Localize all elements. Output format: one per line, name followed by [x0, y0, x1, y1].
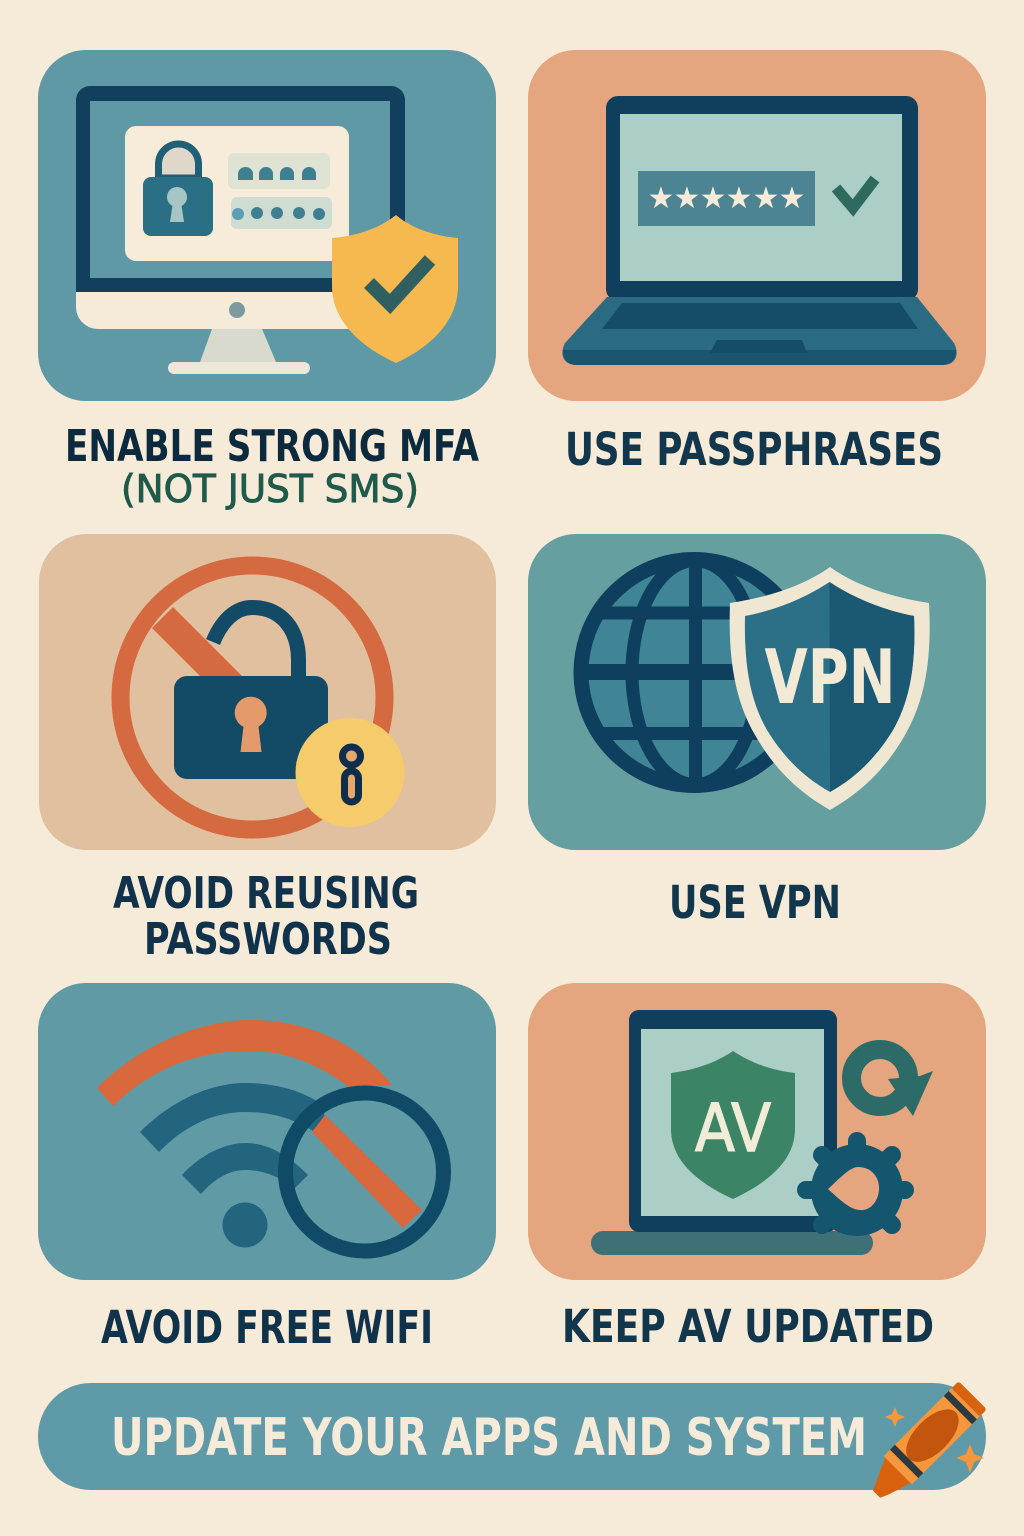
panel: use passphrases [528, 50, 986, 401]
icon: yellow shield with check [332, 215, 458, 363]
icon: prohibited padlock with key badge [120, 566, 404, 830]
icon: laptop with AV shield [591, 1010, 873, 1255]
icon: laptop with password field: ★ [700, 181, 726, 216]
icon: refresh arrow [852, 1050, 933, 1116]
icon: laptop with password field: ★ [779, 181, 805, 216]
icon: laptop with AV shield: AV [695, 1090, 771, 1167]
icon: VPN shield: VPN [764, 633, 896, 721]
panel: keep AV updated [528, 983, 986, 1280]
icon: laptop with password field: ★ [648, 181, 674, 216]
icon: laptop with password field: ★ [726, 181, 752, 216]
icon: laptop with password field: ★ [674, 181, 700, 216]
subheading: not just SMS: (NOT JUST SMS) [121, 467, 419, 511]
heading: enable strong MFA: ENABLE STRONG MFA [65, 421, 479, 472]
panel: avoid reusing passwords [39, 534, 496, 850]
icon: orange crayon with sparkles [861, 1381, 987, 1507]
banner: update your apps and system [38, 1381, 987, 1507]
heading: use VPN: USE VPN [669, 876, 841, 929]
heading: avoid free wifi: AVOID FREE WIFI [101, 1301, 433, 1354]
panel: enable strong MFA [38, 50, 496, 401]
heading: avoid reusing passwords [113, 868, 419, 965]
icon: laptop with password field: ★ [753, 181, 779, 216]
icon: VPN shield [730, 567, 930, 810]
heading: keep AV updated: KEEP AV UPDATED [562, 1300, 934, 1353]
heading: avoid reusing passwords: PASSWORDS [144, 914, 392, 965]
icon: crossed wifi [97, 1020, 444, 1251]
icon: gear [806, 1141, 905, 1236]
icon: laptop with password field [562, 96, 957, 365]
heading: avoid reusing passwords: AVOID REUSING [113, 868, 419, 919]
panel: use VPN [528, 534, 986, 850]
panel: avoid free wifi [38, 983, 496, 1280]
icon: desktop monitor with login [76, 86, 406, 374]
icon: globe [578, 558, 810, 788]
